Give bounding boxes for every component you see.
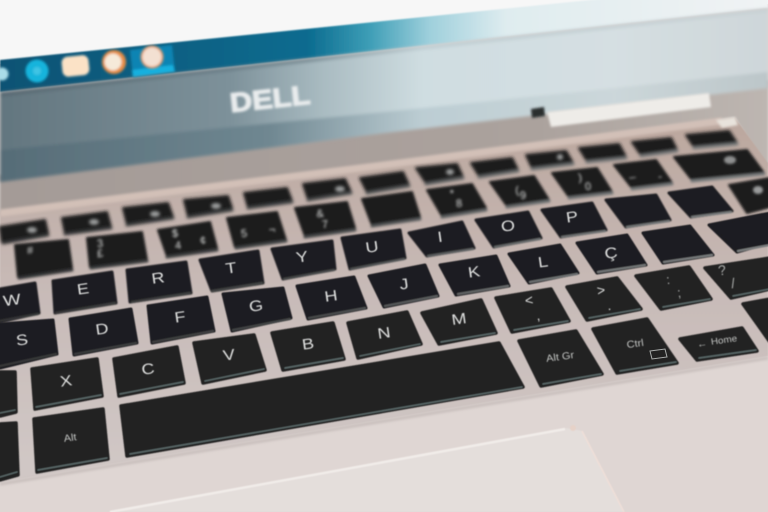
number key legends: * — [449, 188, 456, 200]
number key legends: ) — [578, 172, 583, 184]
function key row — [0, 131, 737, 243]
letter legends: G — [248, 297, 264, 316]
number key legends: ( — [515, 185, 520, 197]
display bezel — [0, 8, 768, 182]
letter legends: ? — [717, 262, 727, 278]
Ctrl menu icon — [650, 349, 667, 359]
letter legends: > — [596, 282, 606, 298]
letter legends: W — [2, 291, 22, 310]
number key legends: & — [316, 208, 325, 220]
laptop screen — [0, 0, 768, 64]
number key legends: 5 — [240, 228, 248, 240]
letter legends: K — [467, 263, 481, 281]
letter legends: M — [450, 309, 468, 329]
taskbar icons — [0, 46, 164, 82]
letter legends: . — [606, 298, 612, 313]
number key legends: _ — [627, 167, 637, 179]
letter legends — [2, 208, 738, 445]
letter legends: L — [537, 253, 549, 271]
letter legends: D — [94, 320, 110, 338]
letter legends: U — [364, 238, 380, 256]
letter legends: ; — [676, 285, 682, 300]
Dell logo: DELL — [229, 81, 312, 119]
letter legends: P — [565, 208, 579, 226]
letter legends: B — [301, 335, 315, 353]
letter legends: N — [376, 324, 392, 342]
rear deck behind the hinge — [0, 80, 768, 215]
letter legends: O — [500, 217, 516, 236]
letter legends: Y — [295, 248, 309, 266]
letter legends: , — [535, 308, 541, 323]
number key legends: - — [658, 171, 663, 183]
letter legends: : — [665, 272, 671, 287]
number key legends — [26, 156, 763, 260]
letter legends: Home — [710, 334, 738, 348]
number key legends: £ — [96, 248, 104, 260]
number key legends: 0 — [584, 181, 592, 193]
letter legends: J — [398, 275, 410, 293]
top letter row — [0, 187, 732, 322]
letter legends: T — [224, 259, 238, 277]
letter legends: C — [140, 360, 156, 378]
bottom letter row — [0, 258, 768, 416]
letter legends: Alt Gr — [545, 349, 575, 365]
number key legends: # — [26, 245, 35, 257]
letter legends: Ç — [603, 244, 619, 262]
number key legends: 9 — [519, 190, 527, 202]
number key legends: 3 — [96, 238, 104, 250]
letter legends: H — [323, 287, 339, 305]
letter legends: R — [150, 269, 166, 287]
letter legends: I — [436, 228, 444, 246]
letter legends: V — [222, 346, 236, 364]
space bar row — [0, 299, 768, 480]
number key legends: 4 — [174, 240, 182, 252]
letter legends: / — [730, 275, 736, 291]
keyboard well — [0, 117, 768, 484]
letter legends: X — [59, 372, 73, 390]
letter legends: Ctrl — [626, 337, 644, 351]
number key legends: 8 — [455, 198, 463, 210]
home letter row — [0, 213, 768, 368]
trackpad — [108, 425, 624, 512]
hinge latch and white strip — [531, 93, 711, 127]
letter legends: F — [173, 308, 187, 326]
number key legends: $ — [171, 228, 179, 240]
letter legends: S — [15, 331, 29, 349]
number key row — [15, 150, 768, 278]
letter legends: ← — [696, 338, 708, 351]
taskbar — [0, 0, 768, 92]
letter legends: E — [76, 280, 90, 298]
letter legends: Alt — [63, 432, 77, 445]
active taskbar tile — [130, 45, 175, 78]
letter legends: < — [524, 292, 534, 308]
number key legends: ¬ — [268, 224, 276, 236]
number key legends: 7 — [321, 219, 329, 231]
function key legends — [27, 154, 563, 233]
number key legends: ¢ — [199, 235, 207, 247]
